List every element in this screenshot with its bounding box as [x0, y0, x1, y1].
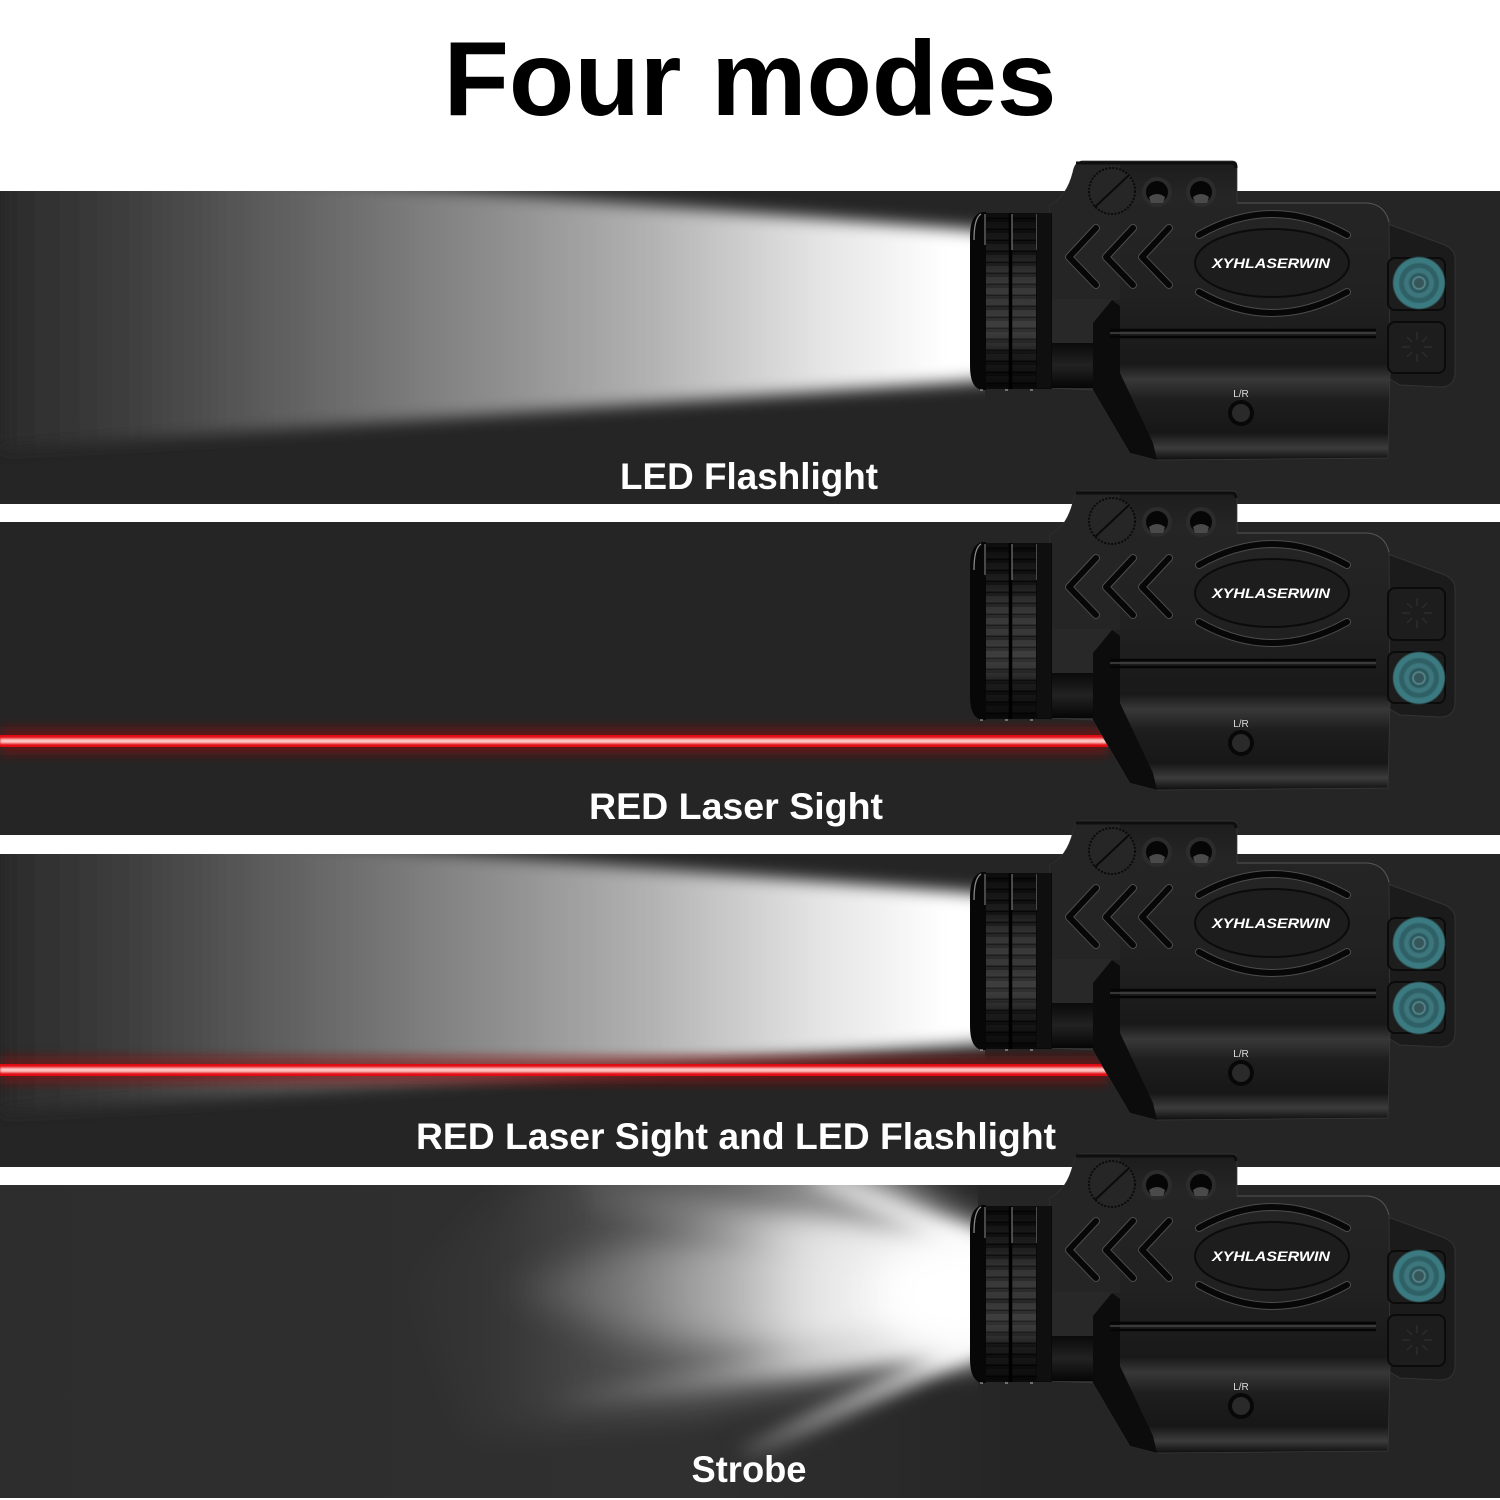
laser: red beam — [0, 727, 1108, 755]
switch label: L/R — [1233, 1382, 1249, 1393]
beam: strobe rays — [499, 1185, 978, 1460]
button: active top — [1393, 917, 1445, 969]
laser: red beam — [0, 1056, 1108, 1084]
device: strobe mode — [970, 1154, 1455, 1453]
logo: XYHLASERWIN — [1211, 1248, 1331, 1264]
button: active bottom — [1393, 982, 1445, 1034]
switch label: L/R — [1233, 1049, 1249, 1060]
beam: flashlight — [17, 191, 985, 445]
label: RED Laser Sight: RED Laser Sight — [589, 786, 883, 827]
logo: XYHLASERWIN — [1211, 255, 1331, 271]
logo: XYHLASERWIN — [1211, 915, 1331, 931]
button: active bottom — [1393, 652, 1445, 704]
panel: LED Flashlight — [0, 155, 1500, 504]
switch label: L/R — [1233, 389, 1249, 400]
label: Strobe: Strobe — [692, 1449, 806, 1490]
label: RED Laser Sight and LED Flashlight: RED Laser Sight and LED Flashlight — [416, 1116, 1056, 1157]
panel: RED Laser Sight — [0, 491, 1500, 835]
logo: XYHLASERWIN — [1211, 585, 1331, 601]
panel: RED Laser Sight and LED Flashlight — [0, 818, 1500, 1167]
switch label: L/R — [1233, 719, 1249, 730]
label: LED Flashlight: LED Flashlight — [620, 456, 878, 497]
panel: Strobe — [0, 1150, 1500, 1498]
button: inactive bottom — [1402, 1325, 1432, 1355]
device: flashlight mode — [970, 161, 1455, 460]
device: laser mode — [970, 491, 1455, 790]
device: combined mode — [970, 821, 1455, 1120]
button: inactive bottom — [1402, 332, 1432, 362]
button: active top — [1393, 1250, 1445, 1302]
beam: flashlight — [17, 854, 985, 1108]
button: active top — [1393, 257, 1445, 309]
button: inactive top — [1402, 598, 1432, 628]
title: Four modes — [444, 20, 1056, 138]
